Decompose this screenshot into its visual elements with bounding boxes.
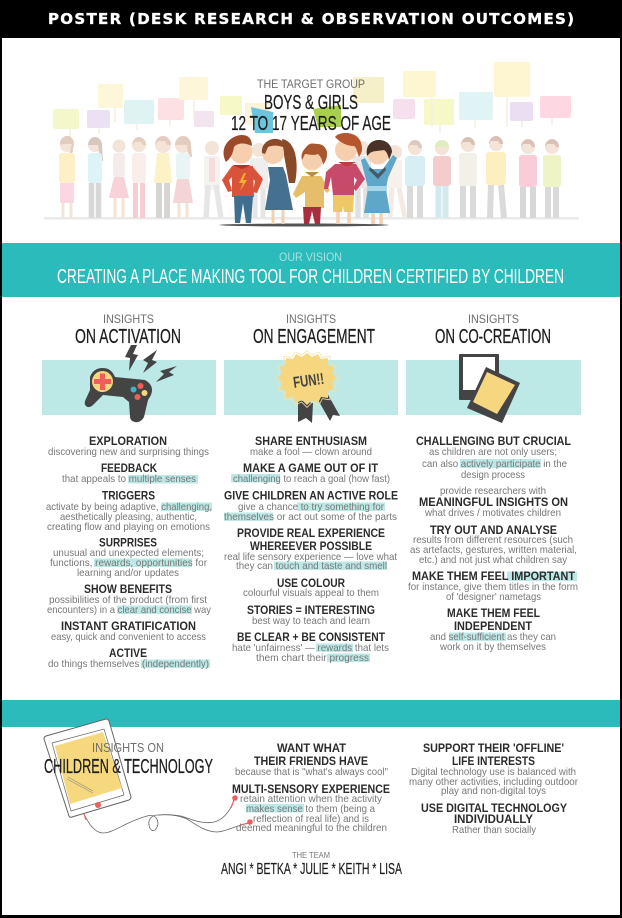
text: engagement insights: PROVIDE REAL EXPERIENCE bbox=[237, 528, 385, 540]
text: technology insights right column: play and non-digital toys bbox=[441, 786, 546, 797]
text: activation insights: TRIGGERS bbox=[102, 490, 155, 502]
text: engagement insights: USE COLOUR bbox=[277, 578, 346, 590]
heading: target group: THE TARGET GROUP bbox=[257, 77, 365, 91]
text: engagement insights: BE CLEAR + BE CONSISTENT bbox=[237, 632, 385, 644]
heading: target group: BOYS & GIRLS bbox=[264, 92, 358, 114]
text: activation insights: easy, quick and convenient to access bbox=[51, 632, 206, 643]
text: co-creation insights: MAKE THEM FEEL bbox=[447, 608, 540, 620]
text: engagement insights: colourful visuals appeal to them bbox=[243, 588, 379, 599]
text: technology insights middle column: reflection of real life) and is bbox=[253, 814, 369, 825]
text: activation insights: functions, rewards, opportunities for bbox=[50, 558, 208, 569]
heading: engagement: ON ENGAGEMENT bbox=[253, 326, 375, 348]
text: co-creation insights: of 'designer' nametags bbox=[446, 592, 541, 603]
text: co-creation insights: as children are not only users; bbox=[429, 447, 557, 458]
text: activation insights: that appeals to multiple senses bbox=[62, 474, 196, 485]
text: engagement insights: STORIES = INTERESTING bbox=[247, 605, 375, 617]
text: activation insights: SURPRISES bbox=[99, 538, 157, 550]
text: co-creation insights: MAKE THEM FEEL IMPORTANT bbox=[412, 571, 575, 583]
team credits bbox=[221, 850, 402, 878]
text: engagement insights: they can touch and taste and smell bbox=[236, 561, 387, 572]
text: co-creation insights: what drives / motivates children bbox=[424, 508, 561, 519]
heading: children and technology: CHILDREN & TECHNOLOGY bbox=[44, 756, 213, 778]
heading: children and technology: INSIGHTS ON bbox=[92, 741, 164, 755]
text: technology insights middle column bbox=[232, 743, 390, 834]
text: activation insights: discovering new and surprising things bbox=[48, 447, 209, 458]
text: engagement insights: MAKE A GAME OUT OF IT bbox=[243, 463, 378, 475]
panel: children and technology bbox=[44, 719, 579, 836]
panel: vision band: OUR VISION bbox=[279, 252, 342, 264]
text: activation insights: encounters) in a clear and concise way bbox=[47, 605, 212, 616]
text: engagement insights: make a fool — clown around bbox=[250, 447, 372, 458]
title: POSTER (DESK RESEARCH & OBSERVATION OUTCOMES) bbox=[48, 10, 574, 28]
heading: activation bbox=[75, 312, 181, 348]
team credits: ANGI * BETKA * JULIE * KEITH * LISA bbox=[221, 861, 402, 878]
panel: target group illustration bbox=[44, 62, 579, 226]
heading: target group: 12 TO 17 YEARS OF AGE bbox=[231, 113, 391, 135]
heading: co-creation bbox=[435, 312, 551, 348]
text: co-creation insights: and self-sufficient as they can bbox=[430, 632, 556, 643]
text: activation insights: FEEDBACK bbox=[101, 463, 158, 475]
text: engagement insights: WHEREEVER POSSIBLE bbox=[250, 541, 372, 553]
icon: photo frames bbox=[406, 354, 581, 423]
text: activation insights: INSTANT GRATIFICATION bbox=[61, 621, 196, 633]
text: activation insights: creating flow and playing on emotions bbox=[47, 522, 210, 533]
text: activation insights: learning and/or updates bbox=[77, 568, 179, 579]
text: technology insights right column: LIFE INTERESTS bbox=[452, 756, 535, 768]
text: technology insights right column: Digital technology use is balanced with bbox=[411, 767, 576, 778]
text: technology insights right column bbox=[409, 743, 579, 836]
text: co-creation insights: design process bbox=[461, 470, 525, 481]
child 5 bbox=[361, 140, 397, 224]
text: activation insights: possibilities of the product (from first bbox=[49, 595, 207, 606]
text: engagement insights: challenging to reach a goal (how fast) bbox=[233, 474, 390, 485]
text: co-creation insights: CHALLENGING BUT CRUCIAL bbox=[416, 436, 571, 448]
heading: children and technology bbox=[44, 741, 213, 778]
text: engagement insights: real life sensory experience — love what bbox=[224, 552, 397, 563]
child 4 bbox=[324, 133, 365, 224]
icon: game controller bbox=[42, 345, 216, 422]
text: technology insights right column: Rather than socially bbox=[452, 825, 537, 836]
heading: activation: INSIGHTS bbox=[103, 312, 154, 326]
text: co-creation insights: for instance, give them titles in the form bbox=[408, 582, 578, 593]
text: technology insights right column: USE DIGITAL TECHNOLOGY bbox=[421, 803, 567, 815]
text: engagement insights: themselves or act out some of the parts bbox=[224, 512, 397, 523]
child 1 bbox=[222, 135, 263, 223]
text: co-creation insights: results from different resources (such bbox=[413, 535, 573, 546]
heading: co-creation: INSIGHTS bbox=[468, 312, 519, 326]
text: engagement insights: them chart their progress bbox=[256, 653, 369, 664]
text: co-creation insights: etc.) and not just what children say bbox=[419, 555, 568, 566]
text: engagement insights: hate 'unfairness' — rewards that lets bbox=[232, 643, 389, 654]
text: co-creation insights: provide researchers with bbox=[440, 486, 546, 497]
text: co-creation insights: can also actively participate in the bbox=[422, 459, 567, 470]
text: engagement insights: give a chance to try something for bbox=[238, 502, 385, 513]
text: technology insights right column: many other activities, including outdoor bbox=[409, 777, 579, 788]
icon: fun badge bbox=[224, 351, 398, 423]
text: technology insights right column: SUPPORT THEIR 'OFFLINE' bbox=[423, 743, 564, 755]
team credits: THE TEAM bbox=[292, 850, 330, 860]
text: engagement insights: best way to teach and learn bbox=[252, 616, 370, 627]
text: engagement insights bbox=[224, 436, 398, 664]
heading: activation: ON ACTIVATION bbox=[75, 326, 181, 348]
text: technology insights middle column: deemed meaningful to the children bbox=[236, 823, 387, 834]
heading: engagement: INSIGHTS bbox=[286, 312, 336, 326]
text: engagement insights: SHARE ENTHUSIASM bbox=[255, 436, 367, 448]
text: engagement insights: GIVE CHILDREN AN ACTIVE ROLE bbox=[224, 490, 398, 502]
icon: tablet with earphones bbox=[44, 719, 253, 833]
text: technology insights middle column: makes sense to them (being a bbox=[246, 804, 375, 815]
text: co-creation insights: work on it by themselves bbox=[439, 642, 546, 653]
foreground children bbox=[219, 133, 397, 226]
text: activation insights: do things themselves (independently) bbox=[48, 659, 209, 670]
text: co-creation insights: INDEPENDENT bbox=[454, 621, 532, 633]
heading: engagement bbox=[253, 312, 375, 348]
text: activation insights: unusual and unexpected elements; bbox=[53, 548, 204, 559]
band: technology section bbox=[2, 700, 620, 727]
text: co-creation insights: as artefacts, gestures, written material, bbox=[410, 545, 577, 556]
text: technology insights right column: INDIVIDUALLY bbox=[454, 814, 533, 826]
icon: fun badge: FUN!! bbox=[292, 371, 325, 392]
child 3 bbox=[293, 144, 330, 224]
text: activation insights bbox=[46, 436, 212, 670]
coloured bubbles behind heading bbox=[251, 105, 341, 133]
panel: vision band bbox=[2, 243, 620, 297]
text: technology insights middle column: retain attention when the activity bbox=[240, 794, 383, 805]
text: activation insights: ACTIVE bbox=[109, 648, 147, 660]
panel: insights on activation bbox=[42, 312, 216, 670]
speech bubbles background bbox=[53, 62, 571, 137]
text: activation insights: EXPLORATION bbox=[89, 436, 167, 448]
text: activation insights: SHOW BENEFITS bbox=[84, 584, 172, 596]
text: technology insights middle column: because that is "what's always cool" bbox=[235, 767, 388, 778]
text: technology insights middle column: THEIR FRIENDS HAVE bbox=[254, 756, 368, 768]
heading: target group bbox=[231, 77, 391, 135]
text: activation insights: activate by being adaptive, challenging, bbox=[46, 502, 212, 513]
text: activation insights: aesthetically pleasing, authentic, bbox=[60, 512, 197, 523]
panel: insights on co-creation bbox=[406, 312, 581, 653]
text: co-creation insights bbox=[408, 436, 578, 653]
background crowd bbox=[44, 136, 579, 220]
text: co-creation insights: MEANINGFUL INSIGHTS ON bbox=[419, 497, 568, 509]
child 2 bbox=[262, 139, 297, 224]
heading: co-creation: ON CO-CREATION bbox=[435, 326, 551, 348]
text: technology insights middle column: WANT WHAT bbox=[277, 743, 346, 755]
panel: insights on engagement bbox=[224, 312, 398, 664]
text: co-creation insights: TRY OUT AND ANALYSE bbox=[430, 525, 557, 537]
text: technology insights middle column: MULTI-SENSORY EXPERIENCE bbox=[232, 784, 390, 796]
